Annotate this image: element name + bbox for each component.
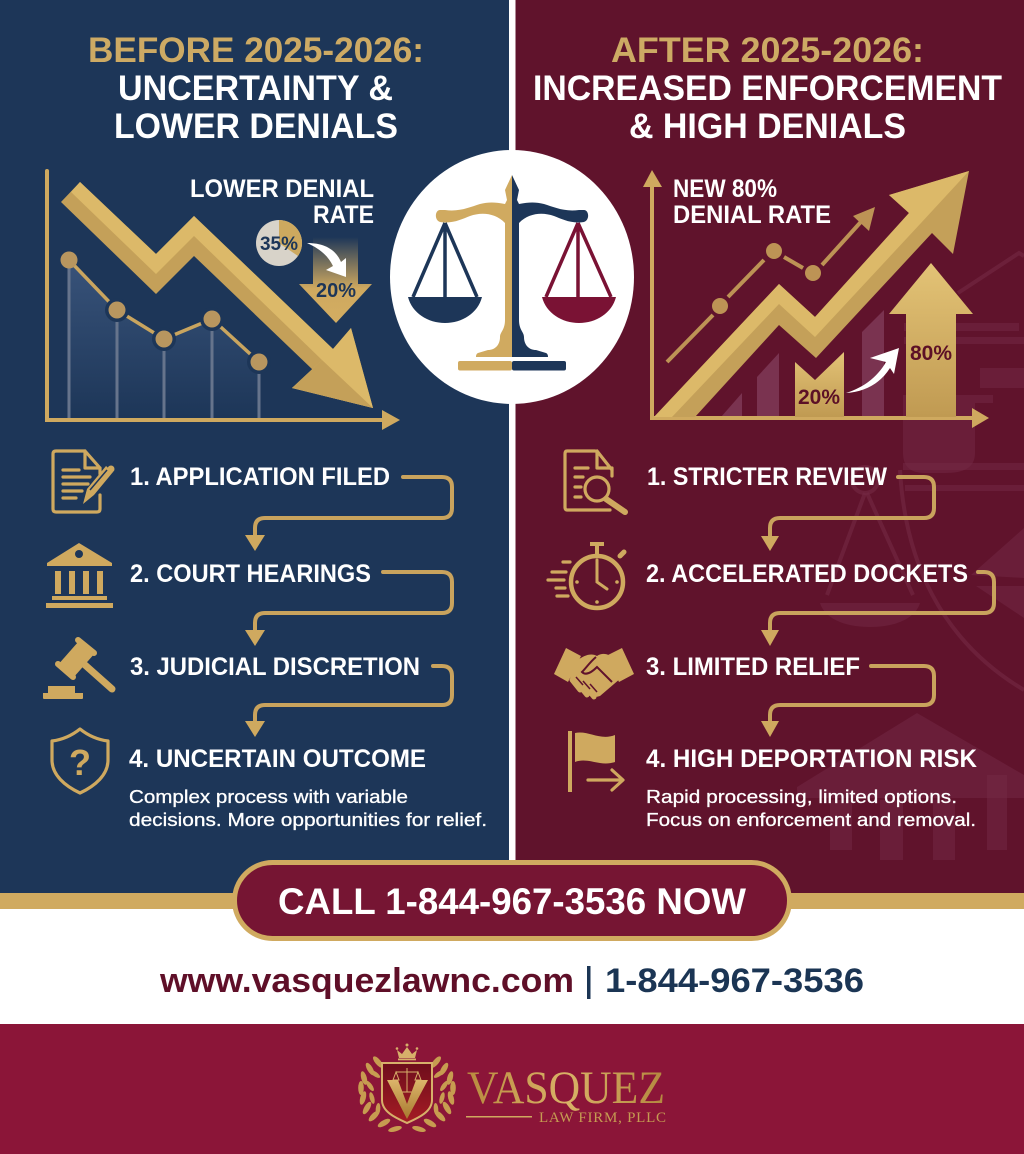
curved white arrow (846, 348, 899, 393)
connector 2 (761, 572, 994, 646)
description: before: Complex process with variable (129, 786, 408, 807)
website and phone (159, 962, 864, 1000)
pie: 35 percent: 35% (260, 234, 298, 255)
scales: left pan (408, 223, 482, 323)
heading: before: BEFORE 2025-2026: (88, 31, 424, 70)
chart axes (47, 171, 385, 420)
step 1: application filed (53, 451, 390, 512)
panel: after (515, 0, 1024, 900)
step 1: stricter review (565, 451, 887, 512)
call to action pill: CALL 1-844-967-3536 NOW (278, 881, 746, 922)
label: new 80 percent denial rate: NEW 80% (673, 175, 777, 203)
bar arrow: 80 percent (889, 263, 973, 417)
logo small scales (393, 1068, 421, 1092)
label: lower denial rate: RATE (313, 201, 374, 229)
label: new 80 percent denial rate (673, 175, 831, 229)
description: before (129, 786, 487, 830)
heading: before (88, 31, 424, 146)
faded bars (721, 310, 884, 417)
website and phone: www.vasquezlawnc.com (159, 962, 574, 1000)
logo shield (382, 1063, 432, 1123)
logo crown (396, 1044, 418, 1060)
chart axes (652, 185, 975, 418)
step 4: uncertain outcome: 4. UNCERTAIN OUTCOME (129, 745, 426, 773)
description: after (646, 786, 976, 830)
heading: after (533, 31, 1002, 146)
steps: after (548, 451, 994, 830)
step 2: accelerated dockets: 2. ACCELERATED DOCKETS (646, 560, 968, 588)
website and phone: 1-844-967-3536 (605, 962, 864, 1000)
heading: after: & HIGH DENIALS (629, 107, 906, 146)
chart: rising denial rate (643, 170, 989, 428)
pie: 35 percent (256, 220, 302, 266)
logo: Vasquez Law Firm: LAW FIRM, PLLC (539, 1110, 666, 1126)
logo: Vasquez Law Firm (358, 1044, 666, 1133)
down arrow: 20 percent (299, 237, 372, 323)
scales: stand navy half (512, 175, 588, 370)
step 3: limited relief: 3. LIMITED RELIEF (646, 653, 860, 681)
heading: before: UNCERTAINTY & (118, 69, 393, 108)
gold band (0, 893, 1024, 909)
scales: stand gold half (436, 175, 512, 370)
step 1: stricter review: 1. STRICTER REVIEW (647, 463, 887, 491)
connector 3 (761, 666, 934, 737)
bar arrow: 80 percent: 80% (910, 342, 952, 365)
step 2: accelerated dockets (548, 542, 968, 608)
label: new 80 percent denial rate: DENIAL RATE (673, 201, 831, 229)
step 2: court hearings (46, 543, 371, 608)
chart: falling denial rate (47, 171, 400, 430)
big up arrow (654, 171, 969, 417)
white divider (509, 0, 516, 895)
connector 1 (761, 477, 934, 551)
call to action pill (234, 862, 790, 938)
step 4: high deportation risk (570, 731, 977, 792)
scales: right pan (542, 223, 616, 323)
area under line (69, 260, 259, 418)
logo laurel wreath (358, 1055, 456, 1133)
center scales emblem (390, 150, 634, 404)
data line with points (60, 252, 271, 374)
watermark: courthouse and scales (797, 253, 1024, 860)
step 2: court hearings: 2. COURT HEARINGS (130, 560, 371, 588)
heading: after: AFTER 2025-2026: (611, 31, 924, 70)
big down arrow (61, 182, 373, 408)
description: after: Focus on enforcement and removal. (646, 809, 976, 830)
description: before: decisions. More opportunities for relief. (129, 809, 487, 830)
connector 2 (245, 572, 452, 646)
step 4: uncertain outcome (52, 729, 426, 793)
heading: before: LOWER DENIALS (114, 107, 398, 146)
down arrow: 20 percent: 20% (316, 280, 356, 302)
step 3: judicial discretion: 3. JUDICIAL DISCRETION (130, 653, 420, 681)
connector 1 (245, 477, 452, 551)
description: after: Rapid processing, limited options. (646, 786, 957, 807)
bar: 20 percent (795, 352, 844, 417)
bar: 20 percent: 20% (798, 386, 840, 409)
logo V (387, 1080, 428, 1119)
thin trend arrow (667, 207, 875, 362)
label: lower denial rate (190, 175, 374, 229)
step 4: high deportation risk: 4. HIGH DEPORTATION RISK (646, 745, 977, 773)
step 4: uncertain outcome: ? (69, 742, 91, 783)
step 3: limited relief (554, 648, 860, 697)
step 3: judicial discretion (43, 640, 420, 699)
panel: before (0, 0, 510, 900)
logo name: VASQUEZ (467, 1062, 665, 1114)
footer band (0, 1024, 1024, 1154)
label: lower denial rate: LOWER DENIAL (190, 175, 374, 203)
steps: before (43, 451, 487, 830)
step 1: application filed: 1. APPLICATION FILED (130, 463, 390, 491)
heading: after: INCREASED ENFORCEMENT (533, 69, 1002, 108)
connector 3 (245, 666, 452, 737)
